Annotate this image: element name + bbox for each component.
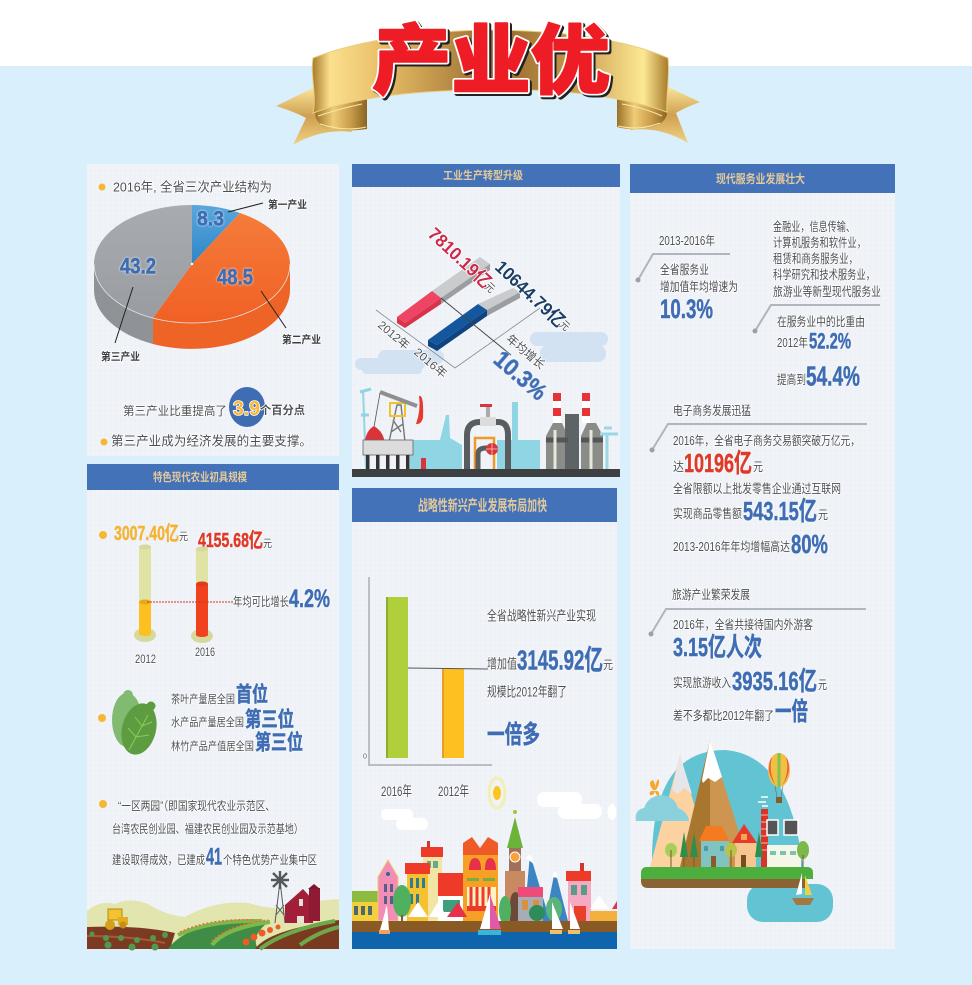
text: one zone two parks: 41 [206, 844, 222, 870]
illustration: eco island [636, 740, 833, 922]
label 2012年: 2012年 [375, 318, 412, 352]
text block: tourism: 一倍 [775, 698, 808, 726]
text block: new service sectors: 在服务业中的比重由 [777, 314, 865, 329]
text block: tourism [648, 587, 866, 726]
value 2016: 10644.79亿 [491, 257, 569, 331]
callout: primary industry: 第一产业 [268, 198, 307, 211]
text block: new service sectors: 租赁和商务服务业， [773, 251, 858, 266]
text block: e-commerce: 电子商务发展迅猛 [673, 403, 751, 418]
icon: pump jack [360, 389, 426, 469]
label 2016年: 2016年 [411, 345, 450, 381]
text: emerging industry value: 3145.92亿 [517, 644, 603, 676]
text block: service growth: 10.3% [660, 294, 713, 324]
text block: tourism: 实现旅游收入 [673, 675, 731, 690]
panel: modern services [630, 164, 895, 949]
panel: modern agriculture [87, 464, 339, 950]
text: annual growth: 4.2% [289, 585, 330, 613]
text block: e-commerce: 元 [818, 508, 828, 522]
text block: tourism: 2016年，全省共接待国内外游客 [673, 617, 813, 632]
text: tertiary share rise: 3.9 [233, 398, 260, 420]
axis label 2016: 2016 [195, 645, 215, 659]
text: one zone two parks: 台湾农民创业园、福建农民创业园及示范基地） [112, 821, 303, 836]
text block: new service sectors: 2012年 [777, 336, 808, 350]
text: emerging industry value: 规模比2012年翻了 [487, 684, 567, 700]
illustration: industry skyline [352, 389, 620, 477]
pie value 8.3: 8.3 [197, 208, 224, 230]
value 2012: 元 [179, 531, 188, 543]
chart: tube 2016 [191, 546, 213, 643]
icon: chimney [758, 797, 768, 867]
icon: sailboat [792, 873, 814, 905]
growth pointer line [441, 298, 511, 355]
bullet [98, 714, 106, 722]
text: emerging industry value: 元 [603, 658, 613, 672]
callout: secondary industry [261, 291, 321, 346]
text block: tourism: 元 [818, 678, 827, 692]
panel: strategic emerging industries [352, 488, 617, 949]
icon: left ribbon tail [276, 88, 367, 145]
text block: tourism: 差不多都比2012年翻了 [673, 709, 774, 723]
header bar: 工业生产转型升级 [443, 168, 523, 182]
header bar [87, 464, 339, 490]
text: tea rank: 首位 [236, 682, 268, 706]
bar chart: 2016年 [381, 783, 412, 799]
bullet [100, 438, 108, 446]
text: tertiary share rise [123, 398, 305, 420]
ground strip [352, 469, 620, 477]
icon: white building [767, 845, 801, 867]
icon: refinery towers [546, 393, 618, 469]
text: tertiary share rise: 第三产业比重提高了 [123, 403, 227, 418]
text block: e-commerce: 全省限额以上批发零售企业通过互联网 [673, 481, 841, 496]
text block: new service sectors: 旅游业等新型现代服务业 [773, 284, 881, 299]
header bar [630, 164, 895, 193]
header bar: 现代服务业发展壮大 [716, 171, 805, 186]
text: forestry rank [171, 730, 303, 754]
text: tea rank [171, 682, 268, 706]
text: forestry rank: 第三位 [255, 730, 303, 754]
illustration: city waterfront [352, 810, 617, 949]
pie value 43.2: 43.2 [120, 254, 156, 278]
text block: e-commerce: 2013-2016年年均增幅高达 [673, 539, 790, 554]
clouds [381, 792, 616, 830]
text: tertiary support: 第三产业成为经济发展的主要支撑。 [111, 434, 312, 448]
text block: new service sectors: 提高到 [777, 372, 806, 387]
title text: 产业优 [372, 20, 610, 104]
text block: service growth: 增加值年均增速为 [660, 279, 738, 294]
3d bar 2016 [428, 288, 520, 351]
text block: e-commerce [650, 403, 867, 559]
value 2016: 4155.68亿 [198, 529, 263, 552]
callout: tertiary industry: 第三产业 [101, 350, 140, 363]
clouds [355, 332, 608, 374]
text block: e-commerce: 80% [791, 529, 828, 559]
title text: 产业优 [372, 20, 610, 104]
callout: secondary industry: 第二产业 [282, 333, 321, 346]
pie chart [94, 205, 290, 349]
3d bar 2012 [397, 257, 490, 328]
text block: e-commerce: 10196亿 [684, 448, 752, 478]
panel: industrial structure pie [87, 164, 339, 456]
axis label 2012: 2012 [135, 652, 156, 666]
text block: tourism: 旅游产业繁荣发展 [672, 587, 750, 602]
icon: pipes and valve [467, 404, 508, 469]
icon: red roof house [732, 824, 757, 867]
header bar [352, 488, 617, 522]
icon: windmill [271, 871, 289, 923]
axes lines [376, 308, 540, 368]
panel: industrial upgrade [352, 164, 620, 477]
text: annual growth: 年均可比增长 [233, 594, 289, 609]
text: aquatic rank [171, 708, 294, 732]
icon: ribbon band [312, 30, 669, 113]
text: emerging industry value [487, 608, 613, 749]
icon: leaf [112, 690, 162, 758]
text block: new service sectors: 计算机服务和软件业， [773, 235, 866, 250]
heading: structure: 2016年, 全省三次产业结构为 [113, 180, 272, 194]
bullet [99, 800, 107, 808]
title ribbon banner [276, 20, 700, 145]
icon: barn [285, 884, 320, 923]
icon: hot air balloon [768, 753, 790, 803]
bar chart: 0 [363, 754, 367, 760]
value 2012: 3007.40亿 [114, 522, 179, 545]
text block: e-commerce: 2016年，全省电子商务交易额突破万亿元， [673, 433, 860, 448]
text block: e-commerce: 元 [753, 460, 763, 474]
header bar: 战略性新兴产业发展布局加快 [418, 496, 547, 514]
bullet [98, 184, 106, 190]
bar chart [363, 577, 492, 799]
text: tertiary share rise: 个百分点 [260, 403, 305, 417]
island ground [641, 867, 813, 888]
text block: service growth: 2013-2016年 [659, 234, 715, 248]
icon: solar panels [767, 820, 798, 835]
text block: service growth: 全省服务业 [660, 262, 709, 277]
text: one zone two parks: “一区两园”（即国家现代农业示范区、 [118, 798, 275, 813]
icon: trees [665, 832, 809, 870]
header bar [352, 164, 620, 187]
text: emerging industry value: 增加值 [487, 656, 517, 672]
text: one zone two parks [112, 798, 317, 870]
illustration: farm [87, 871, 339, 950]
bullet [99, 531, 107, 539]
icon: circle behind 3.9 [229, 387, 265, 427]
text block: tourism: 3935.16亿 [732, 666, 817, 696]
text: aquatic rank: 第三位 [245, 708, 294, 732]
icon: tractor [105, 909, 128, 930]
value 2016: 元 [263, 538, 272, 550]
text block: new service sectors: 科学研究和技术服务业， [773, 267, 875, 282]
label annual growth: 年均增长 [504, 332, 548, 372]
text: one zone two parks: 个特色优势产业集中区 [223, 852, 317, 867]
text block: new service sectors: 52.2% [809, 328, 851, 354]
text: emerging industry value: 全省战略性新兴产业实现 [487, 608, 596, 624]
pie value 48.5: 48.5 [217, 264, 253, 290]
text block: e-commerce: 实现商品零售额 [673, 506, 742, 521]
text: one zone two parks: 建设取得成效，已建成 [112, 852, 205, 867]
value 2016: 元 [557, 319, 572, 334]
text block: e-commerce: 543.15亿 [743, 496, 817, 526]
header bar: 特色现代农业初具规模 [153, 470, 247, 484]
icon: butterfly [650, 779, 659, 796]
text block: tourism: 3.15亿人次 [673, 632, 762, 662]
text block: new service sectors: 金融业，信息传输、 [773, 219, 855, 234]
callout: tertiary industry [101, 287, 140, 363]
text: annual growth [233, 585, 330, 613]
text: forestry rank: 林竹产品产值居全国 [171, 739, 254, 753]
value 2012: 7810.19亿 [424, 224, 496, 292]
icon: orange roof house [699, 826, 729, 867]
text block: new service sectors: 54.4% [806, 360, 860, 392]
text block: new service sectors [752, 219, 881, 392]
value 10.3%: 10.3% [488, 346, 552, 406]
icon: cloud [636, 795, 689, 821]
icon: sun [489, 778, 505, 808]
text: tea rank: 茶叶产量居全国 [171, 692, 235, 706]
dashed growth line [147, 601, 233, 603]
chart: tube 2012 [134, 544, 156, 642]
icon: right ribbon tail [617, 87, 700, 143]
bar chart: 2012年 [438, 783, 469, 799]
text block: service growth [636, 234, 738, 324]
text: emerging industry value: 一倍多 [487, 721, 540, 749]
value 2012: 元 [482, 281, 497, 296]
text: aquatic rank: 水产品产量居全国 [171, 715, 244, 729]
text block: e-commerce: 达 [673, 460, 684, 474]
callout: primary industry [228, 198, 307, 212]
